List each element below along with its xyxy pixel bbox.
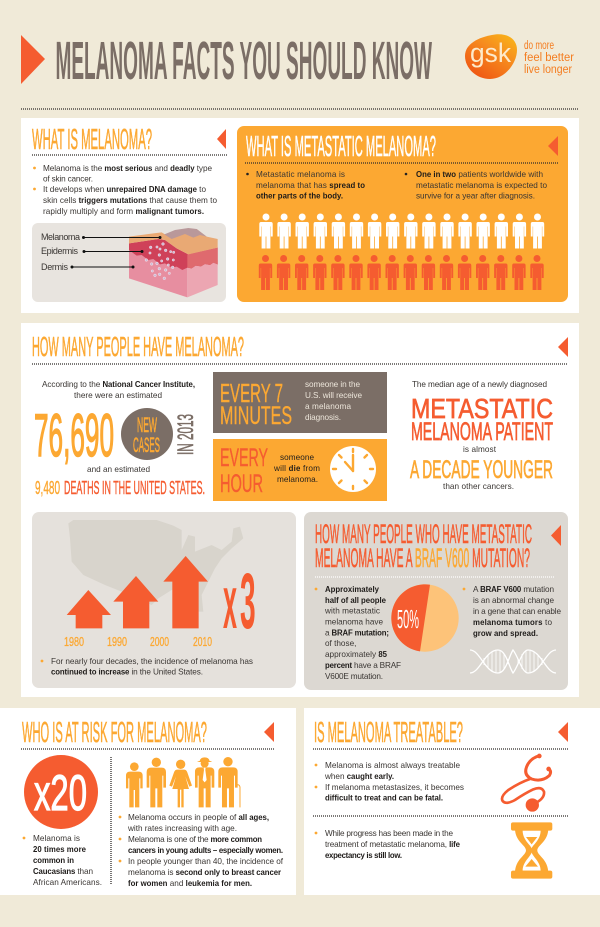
badge: x20: x20 bbox=[34, 765, 87, 821]
text block: age and risk: melanoma is second only to breast cancer bbox=[128, 868, 281, 877]
text block: caught early: difficult to treat and can be fatal. bbox=[325, 794, 443, 802]
pictogram: white people row bbox=[259, 214, 544, 248]
label: in 2013: IN 2013 bbox=[173, 414, 198, 455]
badge: new cases: CASES bbox=[133, 434, 160, 457]
callout: every 7 minutes: a melanoma bbox=[305, 402, 351, 411]
text block: caught early: Melanoma is almost always treatable bbox=[325, 761, 460, 770]
text block: braf definition bbox=[463, 585, 561, 638]
text block: braf definition: A BRAF V600 mutation bbox=[473, 585, 554, 594]
panel: how many people have melanoma: DEATHS IN THE UNITED STATES. bbox=[64, 478, 205, 498]
text block: melanoma definition: Melanoma is the most serious and deadly type bbox=[43, 164, 212, 173]
text block: half of people: melanoma have bbox=[325, 618, 383, 626]
text block: one in two: metastatic melanoma is expected to bbox=[416, 181, 547, 190]
icon: hourglass bbox=[511, 822, 552, 879]
text block: median age: is almost bbox=[463, 445, 497, 454]
label: melanoma bbox=[41, 232, 162, 242]
icon: section triangle bbox=[558, 337, 568, 357]
text block: caucasians: African Americans. bbox=[33, 878, 102, 887]
label: dermis bbox=[41, 262, 134, 272]
icon: dna helix bbox=[470, 650, 556, 673]
logo: gsk: live longer bbox=[524, 64, 572, 76]
text block: half of people: Approximately bbox=[325, 585, 380, 594]
text block: age and risk: In people younger than 40, the incidence of bbox=[128, 857, 284, 866]
label: epidermis: Epidermis bbox=[41, 246, 78, 256]
label: melanoma: Melanoma bbox=[41, 232, 80, 242]
header bbox=[21, 32, 574, 91]
callout: every 7 minutes: diagnosis. bbox=[305, 413, 341, 422]
text block: four decades: For nearly four decades, the incidence of melanoma has bbox=[51, 657, 253, 666]
text block: median age: than other cancers. bbox=[443, 482, 514, 491]
text block: median age: METASTATIC bbox=[411, 393, 553, 424]
text block: metastatic definition bbox=[246, 170, 365, 200]
icon: section triangle bbox=[264, 722, 274, 742]
text block: life expectancy: expectancy is still low. bbox=[325, 851, 402, 860]
badge: x20 bbox=[24, 755, 98, 829]
text block: age and risk: with rates increasing with age. bbox=[127, 824, 237, 833]
stat: deaths: 9,480 bbox=[35, 478, 60, 498]
panel: is melanoma treatable bbox=[304, 708, 600, 895]
badge: new cases bbox=[121, 408, 173, 460]
text block: one in two: One in two patients worldwide with bbox=[416, 170, 543, 179]
axis: years: 1980 bbox=[64, 634, 84, 649]
text block: life expectancy: treatment of metastatic melanoma, life bbox=[325, 840, 461, 849]
text block: age and risk: cancers in young adults – especially women. bbox=[128, 846, 283, 855]
icon: section triangle bbox=[548, 136, 558, 156]
callout: every hour: will die from bbox=[273, 464, 320, 473]
text block: half of people: percent have a BRAF bbox=[325, 661, 401, 670]
callout: every 7 minutes: MINUTES bbox=[220, 402, 292, 430]
icon: stethoscope bbox=[502, 754, 551, 812]
text block: caught early bbox=[315, 761, 464, 802]
text block: age and risk: Melanoma occurs in people of all ages, bbox=[128, 813, 269, 822]
heading: braf bbox=[315, 519, 532, 573]
icon: section triangle bbox=[551, 525, 561, 546]
logo: gsk: do more bbox=[524, 40, 554, 52]
chart: 50 percent pie bbox=[391, 584, 459, 652]
text block: half of people: of those, bbox=[325, 639, 356, 648]
text block: caught early: when caught early. bbox=[324, 772, 394, 781]
chart: 50 percent pie: 50% bbox=[397, 604, 419, 634]
pictogram: family of five bbox=[126, 757, 240, 807]
panel: how many people have melanoma bbox=[21, 323, 579, 697]
text block: caught early: If melanoma metastasizes, it becomes bbox=[325, 783, 464, 792]
logo: gsk: feel better bbox=[524, 52, 574, 64]
icon: header triangle bbox=[21, 35, 45, 84]
text block: caucasians: Caucasians than bbox=[33, 867, 93, 876]
callout: every hour bbox=[213, 439, 387, 501]
text block: braf definition: melanoma tumors to bbox=[473, 618, 552, 627]
callout: every hour: someone bbox=[280, 453, 314, 462]
text block: metastatic definition: Metastatic melanoma is bbox=[256, 170, 345, 179]
callout: every hour: HOUR bbox=[220, 470, 263, 498]
text block: metastatic definition: melanoma that has spread to bbox=[256, 181, 365, 190]
text block: half of people: approximately 85 bbox=[325, 650, 388, 659]
stat: x3: x bbox=[223, 560, 237, 644]
text block: caucasians bbox=[23, 834, 102, 887]
pictogram: orange people row bbox=[259, 255, 544, 290]
callout: every 7 minutes: someone in the bbox=[305, 380, 360, 389]
text block: braf definition: in a gene that can enable bbox=[473, 607, 561, 616]
panel: who is at risk bbox=[0, 708, 296, 895]
text block: melanoma definition: skin cells triggers mutations that cause them to bbox=[43, 196, 217, 205]
label: epidermis bbox=[41, 246, 144, 256]
text block: melanoma definition bbox=[33, 164, 217, 216]
text block: metastatic definition: other parts of the body. bbox=[256, 192, 343, 200]
callout: every 7 minutes: U.S. will receive bbox=[305, 391, 362, 400]
text block: half of people: V600E mutation. bbox=[325, 672, 383, 681]
text block: national cancer institute: there were an estimated bbox=[74, 391, 162, 400]
text block: age and risk: Melanoma is one of the more common bbox=[128, 835, 262, 844]
text block: braf definition: grow and spread. bbox=[473, 629, 538, 638]
panel: what is melanoma bbox=[32, 124, 227, 302]
text block: caucasians: common in bbox=[33, 856, 74, 865]
callout: every 7 minutes bbox=[213, 372, 387, 433]
stat: deaths bbox=[35, 478, 205, 498]
text block: caucasians: 20 times more bbox=[33, 845, 87, 854]
text block: life expectancy bbox=[315, 829, 461, 860]
panel: incidence trend: 3 bbox=[240, 556, 256, 645]
axis: years: 2000 bbox=[150, 634, 169, 649]
text block: melanoma definition: of skin cancer. bbox=[43, 174, 93, 184]
text block: age and risk bbox=[119, 813, 284, 888]
illustration: skin block bbox=[129, 228, 218, 297]
text block: four decades bbox=[41, 657, 253, 676]
panel: what is metastatic melanoma bbox=[237, 126, 568, 302]
text block: melanoma definition: rapidly multiply and form malignant tumors. bbox=[43, 207, 204, 216]
text block: one in two bbox=[405, 170, 547, 200]
axis: years bbox=[64, 634, 212, 649]
text block: national cancer institute bbox=[42, 380, 195, 400]
text block: median age: The median age of a newly diagnosed bbox=[412, 380, 547, 389]
text: and an estimated: and an estimated bbox=[87, 465, 150, 474]
diagram: skin layers bbox=[32, 223, 226, 302]
icon: clock bbox=[330, 446, 376, 492]
callout: every 7 minutes: EVERY 7 bbox=[220, 378, 283, 408]
text block: caucasians: Melanoma is bbox=[33, 834, 80, 843]
text block: age and risk: for women and leukemia for men. bbox=[128, 879, 252, 888]
text block: braf definition: is an abnormal change bbox=[473, 596, 554, 605]
panel: what is melanoma: WHAT IS MELANOMA? bbox=[32, 124, 152, 156]
callout: every hour: melanoma. bbox=[277, 475, 318, 484]
text block: one in two: survive for a year after diagnosis. bbox=[416, 192, 535, 200]
text block: half of people: half of all people bbox=[325, 596, 387, 605]
map: united states bbox=[68, 520, 243, 612]
text block: national cancer institute: According to the National Cancer Institute, bbox=[42, 380, 195, 389]
label: dermis: Dermis bbox=[41, 262, 68, 272]
panel: who is at risk: WHO IS AT RISK FOR MELANOMA? bbox=[22, 717, 207, 749]
logo: gsk: gsk bbox=[470, 38, 511, 68]
callout: every hour: EVERY bbox=[220, 444, 268, 472]
text block: half of people: a BRAF mutation; bbox=[325, 628, 389, 638]
panel: braf v600 mutation bbox=[304, 512, 568, 690]
panel: top row bbox=[21, 118, 579, 313]
text block: median age bbox=[410, 380, 553, 491]
panel: incidence trend bbox=[32, 512, 296, 688]
panel: how many people have melanoma: 76,690 bbox=[34, 402, 114, 469]
chart: rising arrows bbox=[67, 556, 208, 628]
badge: new cases: NEW bbox=[137, 414, 157, 437]
panel: how many people have melanoma: HOW MANY PEOPLE HAVE MELANOMA? bbox=[32, 331, 244, 362]
text block: melanoma definition: It develops when unrepaired DNA damage to bbox=[43, 185, 206, 194]
icon: section triangle bbox=[217, 129, 226, 149]
icon: section triangle bbox=[558, 722, 568, 742]
text block: life expectancy: While progress has been made in the bbox=[325, 829, 453, 838]
text block: half of people bbox=[315, 585, 401, 681]
logo: gsk bbox=[465, 34, 574, 79]
axis: years: 1990 bbox=[107, 634, 127, 649]
axis: years: 2010 bbox=[193, 634, 212, 649]
text block: half of people: with metastatic bbox=[324, 606, 380, 616]
text block: four decades: continued to increase in the United States. bbox=[51, 668, 203, 676]
